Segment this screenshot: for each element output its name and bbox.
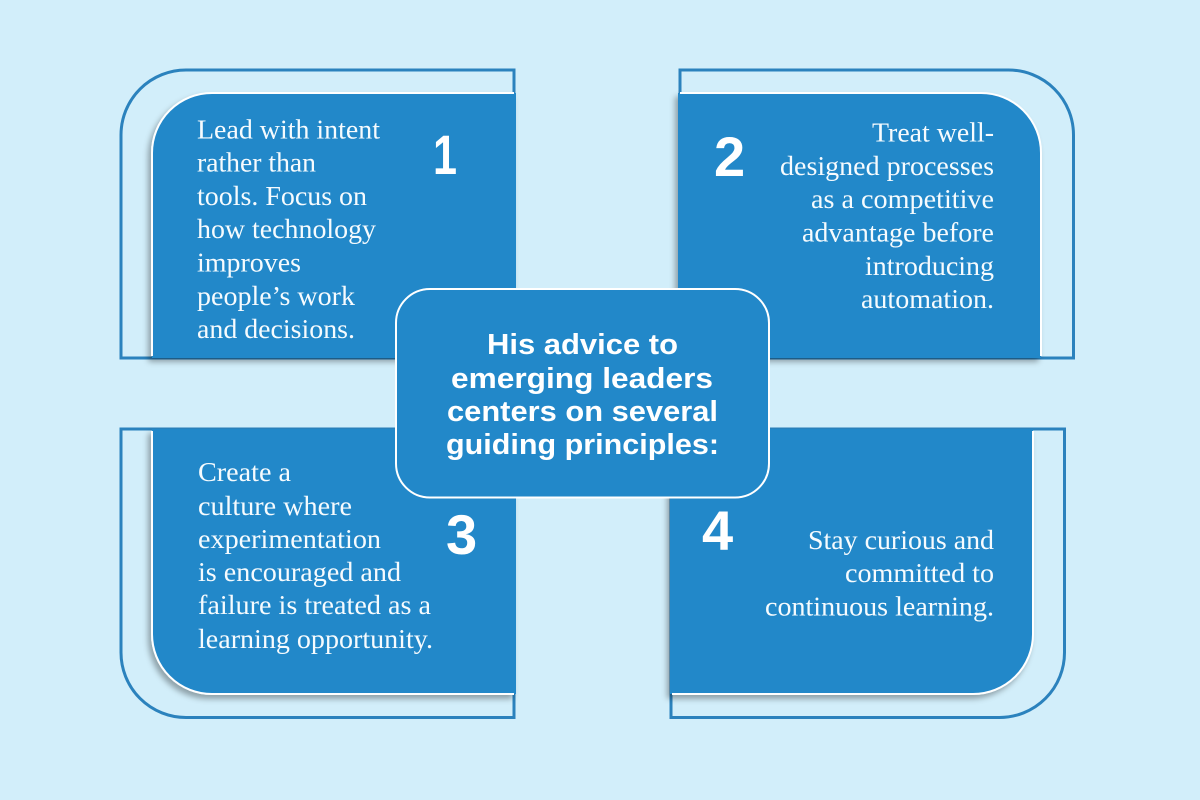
text 2: introducing [865, 250, 994, 281]
text 3: experimentation [198, 523, 381, 554]
outline frame 2 [680, 70, 1074, 358]
text 1: how technology [197, 213, 376, 244]
outline frame 3 [121, 429, 514, 718]
heading: His advice to [487, 329, 678, 361]
text 1: tools. Focus on [197, 180, 367, 211]
text 3: learning opportunity. [198, 623, 433, 654]
text 2: Treat well- [872, 116, 994, 148]
text 2: as a competitive [811, 183, 994, 214]
card 1 [152, 93, 516, 358]
heading: centers on several [447, 396, 718, 428]
text 1: Lead with intent [197, 114, 380, 144]
number 1: 1 [433, 123, 457, 186]
text 4: committed to [845, 557, 994, 588]
text 4: continuous learning. [765, 590, 994, 622]
text 2: automation. [861, 283, 994, 314]
text 3: Create a [198, 456, 291, 487]
number 3: 3 [446, 503, 477, 566]
outline frame 4 [671, 429, 1064, 718]
text 2: designed processes [780, 150, 994, 181]
outline frame 1 [121, 70, 514, 358]
card 4 [670, 429, 1033, 694]
panel: principle 1 [121, 70, 516, 358]
panel: principle 3 [121, 429, 516, 718]
text 1: improves [197, 246, 301, 278]
card 2 [678, 93, 1041, 358]
text 3: failure is treated as a [198, 589, 431, 620]
panel: principle 2 [678, 70, 1074, 358]
number 4: 4 [702, 499, 733, 562]
text 1: people’s work [197, 280, 355, 311]
number 2: 2 [714, 125, 745, 188]
text 3: culture where [198, 490, 352, 521]
text 1: and decisions. [197, 313, 355, 344]
panel: central heading [396, 289, 769, 498]
center box [396, 289, 769, 498]
text 1: rather than [197, 146, 316, 178]
text 4: Stay curious and [808, 524, 994, 555]
heading: guiding principles: [446, 429, 719, 461]
panel: principle 4 [670, 429, 1064, 718]
text 3: is encouraged and [198, 556, 401, 587]
card 3 [152, 429, 516, 694]
text 2: advantage before [802, 216, 994, 248]
heading: emerging leaders [451, 363, 713, 395]
